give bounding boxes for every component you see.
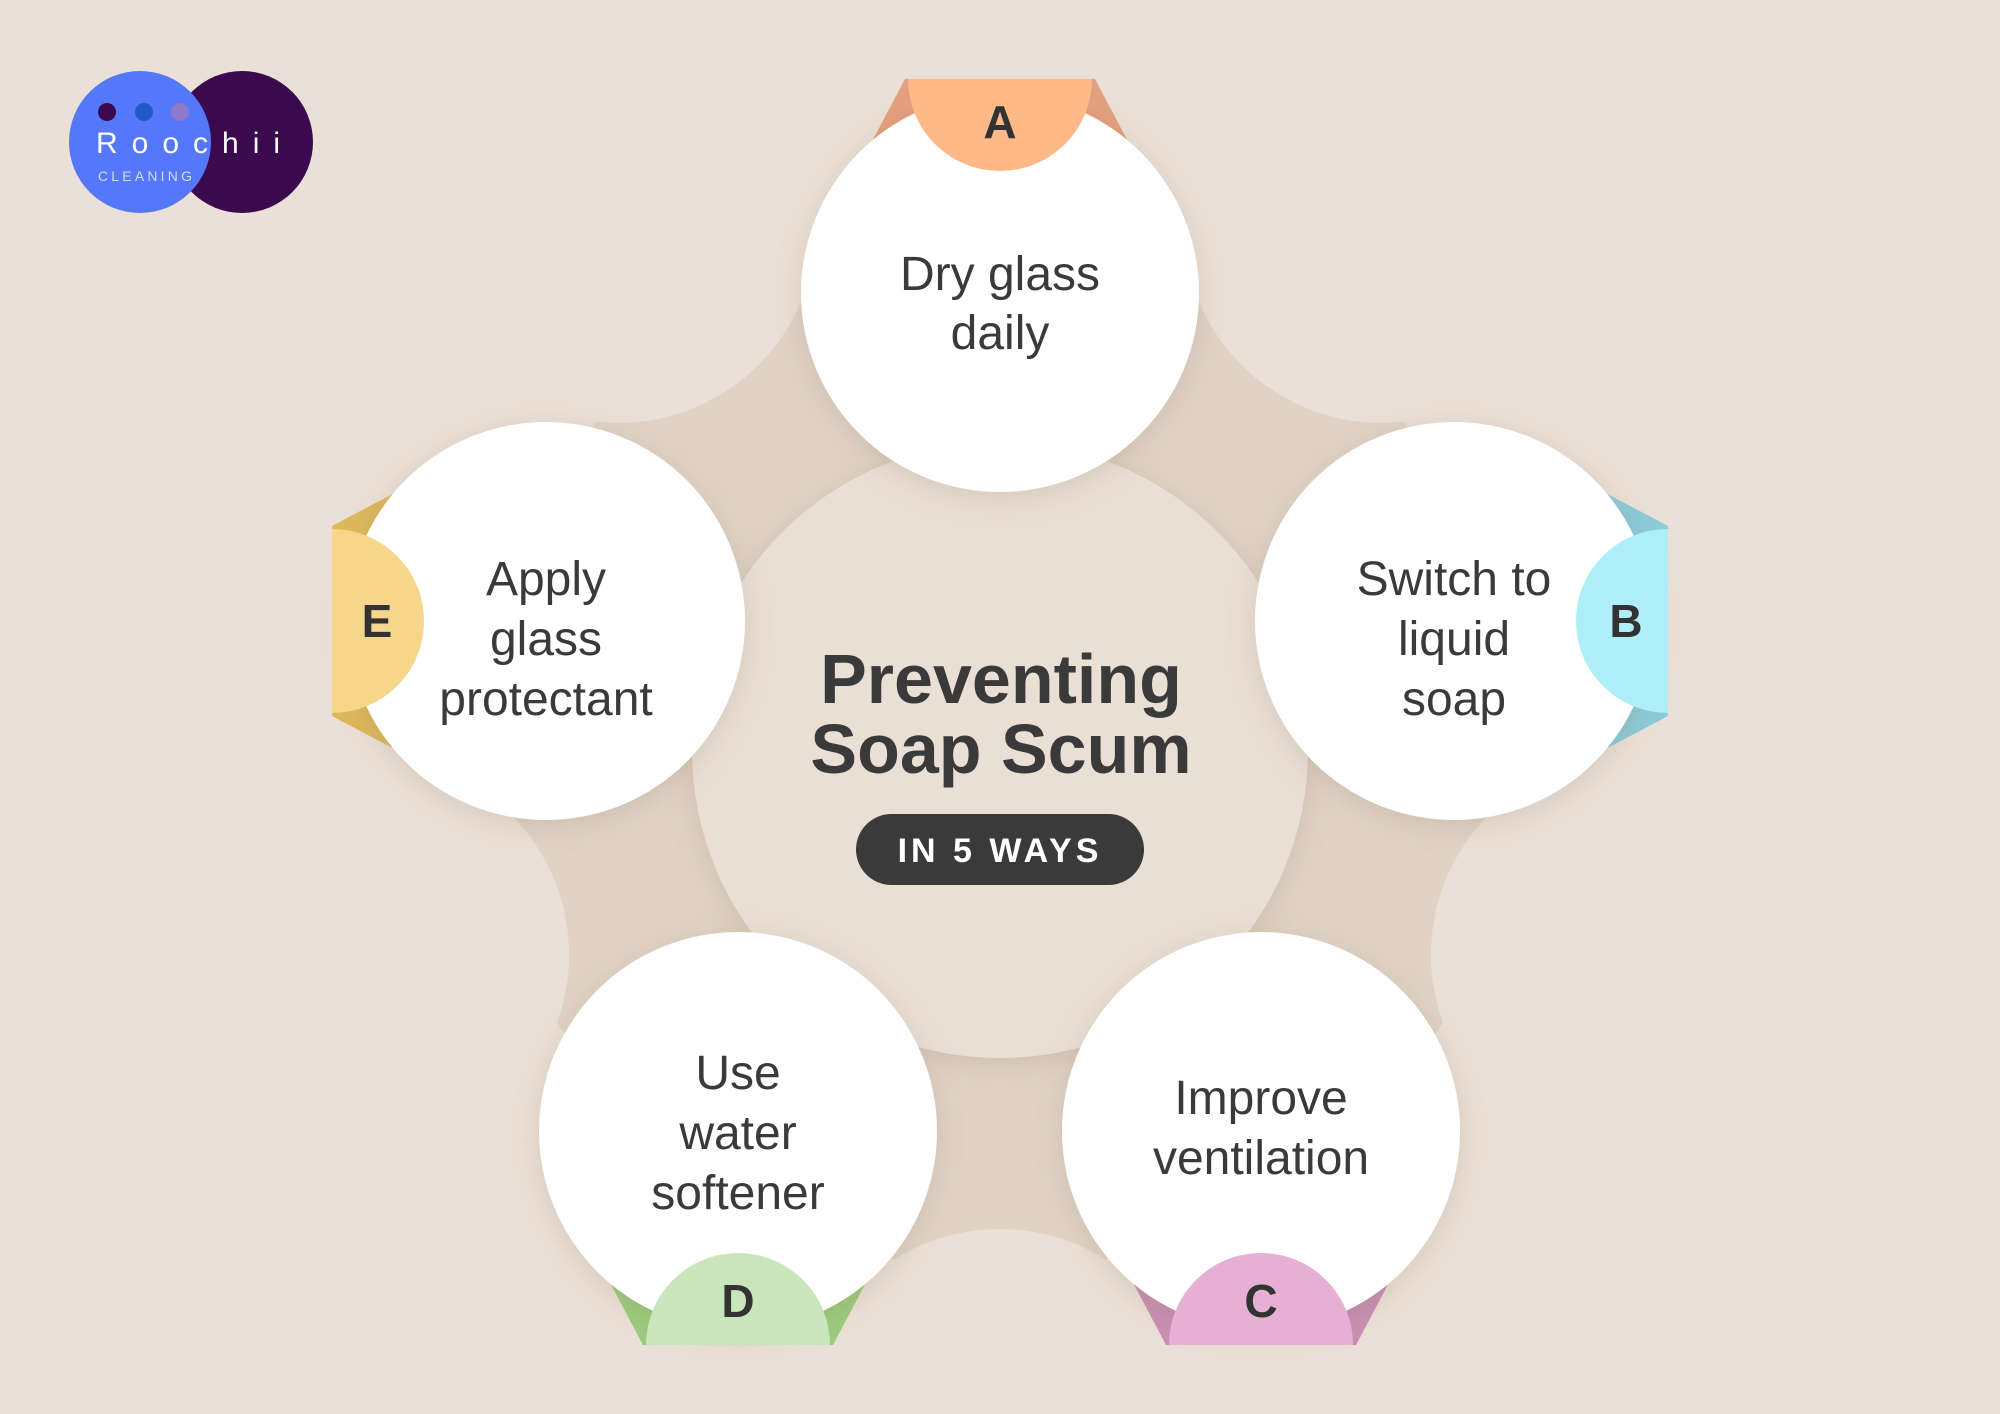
title: Soap Scum bbox=[810, 710, 1192, 788]
step D: softener bbox=[651, 1167, 825, 1220]
pill: in 5 ways: IN 5 WAYS bbox=[898, 832, 1102, 870]
step A: Dry glass bbox=[900, 248, 1100, 301]
step E: Apply bbox=[486, 553, 606, 606]
step B bbox=[1255, 422, 1668, 820]
step A bbox=[801, 79, 1199, 492]
step B: B bbox=[1609, 595, 1643, 647]
center circle bbox=[692, 442, 1308, 1058]
step A: A bbox=[983, 96, 1017, 148]
step E: E bbox=[362, 595, 392, 647]
logo: Roochii bbox=[96, 127, 294, 160]
step B: soap bbox=[1402, 673, 1506, 726]
logo: CLEANING bbox=[98, 168, 195, 184]
step E: protectant bbox=[439, 673, 653, 726]
step E: glass bbox=[490, 613, 602, 666]
step C: Improve bbox=[1174, 1072, 1348, 1125]
step E bbox=[332, 422, 745, 820]
title: Preventing bbox=[820, 640, 1182, 718]
step D: water bbox=[678, 1107, 797, 1160]
pill: in 5 ways bbox=[856, 814, 1144, 885]
step C: C bbox=[1244, 1275, 1278, 1327]
step D bbox=[539, 932, 937, 1345]
step C: ventilation bbox=[1153, 1132, 1369, 1185]
step C bbox=[1062, 932, 1460, 1345]
step D: Use bbox=[695, 1047, 781, 1100]
step A: daily bbox=[951, 307, 1049, 360]
step B: liquid bbox=[1398, 613, 1510, 666]
step B: Switch to bbox=[1357, 553, 1551, 606]
title bbox=[810, 640, 1192, 788]
logo bbox=[69, 71, 313, 213]
step D: D bbox=[721, 1275, 755, 1327]
